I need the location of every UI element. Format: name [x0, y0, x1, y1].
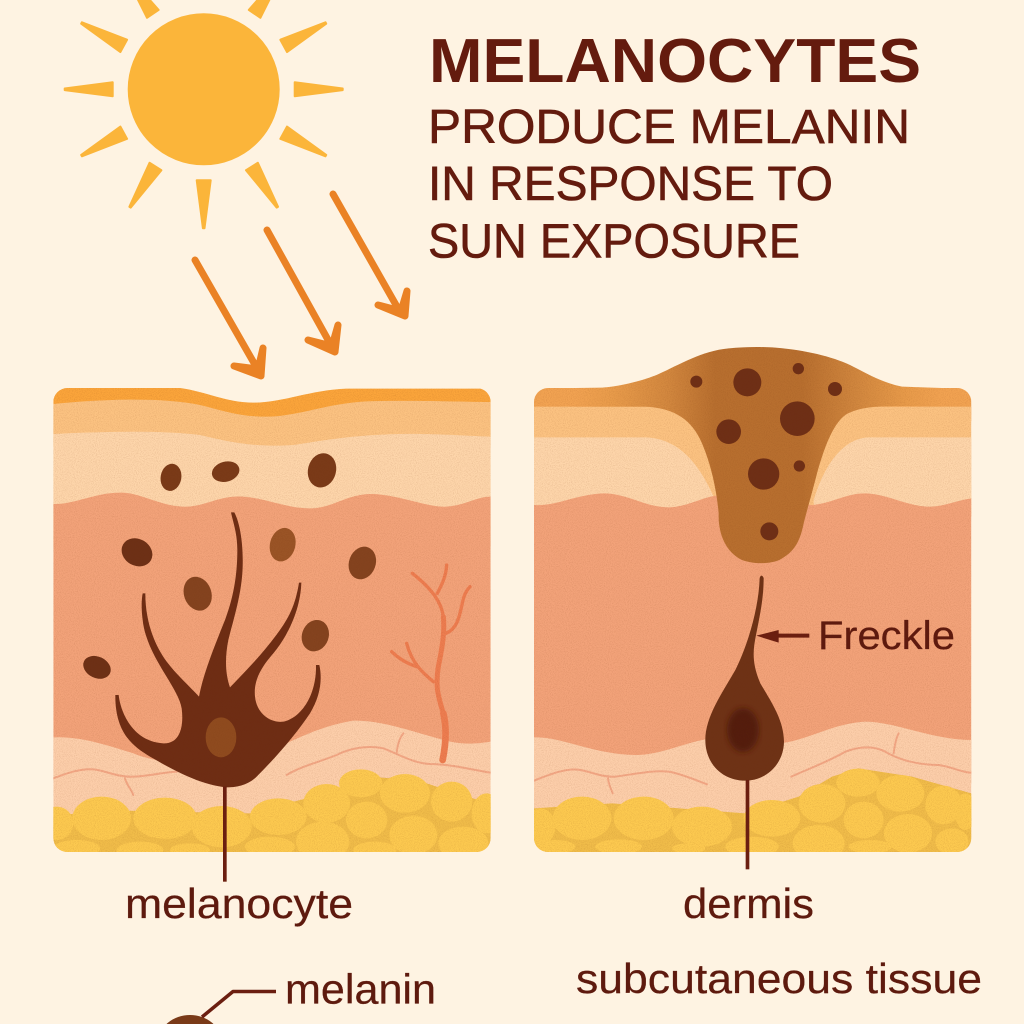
melanin granules — [80, 450, 381, 683]
melanin leader line — [202, 992, 276, 1017]
pigment dots — [690, 363, 842, 540]
freckle cell nucleus — [727, 708, 759, 752]
arrow 2 — [267, 230, 338, 352]
label: melanocyte: melanocyte — [125, 880, 353, 927]
heading: melanocytes: MELANOCYTES — [429, 27, 921, 96]
label: subcutaneous tissue: subcutaneous tissue — [576, 955, 982, 1002]
melanocyte cell — [115, 512, 321, 787]
melanin callout — [159, 966, 436, 1024]
arrow 1 — [195, 260, 263, 376]
freckle pigment mass — [575, 347, 942, 563]
subheading line 2: IN RESPONSE TO — [428, 158, 833, 211]
melanocyte leader line — [223, 787, 227, 882]
freckle melanocyte cell — [705, 576, 784, 781]
melanocyte nucleus — [206, 717, 236, 757]
panel: skin before sun exposure — [40, 388, 502, 882]
label: melanin: melanin — [285, 966, 436, 1012]
arrow 3 — [333, 194, 407, 316]
freckle arrow — [756, 630, 809, 643]
dermis leader line — [746, 780, 749, 869]
subheading line 3: SUN EXPOSURE — [428, 216, 800, 268]
icon: sun — [65, 0, 343, 228]
melanin granule — [159, 1015, 221, 1024]
subheading line 1: PRODUCE MELANIN — [428, 101, 910, 154]
sun ray arrows — [195, 194, 407, 376]
label: dermis: dermis — [683, 880, 814, 927]
label: freckle: Freckle — [818, 614, 955, 658]
panel: freckle — [525, 347, 976, 869]
blood vessel — [392, 565, 470, 760]
title — [428, 27, 921, 268]
